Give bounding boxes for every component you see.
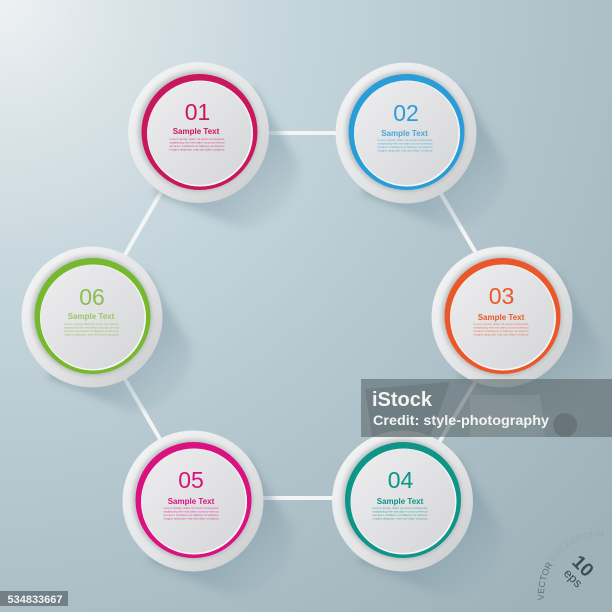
body text 05: sadipscing elitr sed diam nonumy eirmod	[164, 510, 219, 514]
number 06: 06	[79, 284, 105, 310]
body text 02: magna aliquyam erat sed diam voluptua	[378, 148, 433, 152]
body text 04: tempor invidunt ut labore et dolore	[372, 513, 428, 517]
body text 02: Lorem ipsum dolor sit amet consetetur	[378, 138, 432, 142]
hexagon connector lines	[122, 133, 480, 498]
circle 05	[122, 430, 264, 572]
body text 04: Lorem ipsum dolor sit amet consetetur	[372, 506, 428, 510]
long shadows	[47, 88, 602, 596]
body text 04: magna aliquyam erat sed diam voluptua	[372, 516, 428, 520]
body text 05	[164, 506, 219, 520]
body text 02: sadipscing elitr sed diam nonumy eirmod	[378, 142, 433, 146]
number 05: 05	[178, 467, 204, 493]
label 02: Sample Text	[381, 129, 428, 138]
body text 01: Lorem ipsum dolor sit amet consetetur	[170, 137, 224, 141]
body text 04: sadipscing elitr sed diam nonumy eirmod	[372, 510, 428, 514]
body text 06: sadipscing elitr sed diam nonumy eirmod	[64, 326, 119, 330]
label 03: Sample Text	[478, 313, 525, 322]
body text 05: Lorem ipsum dolor sit amet consetetur	[164, 506, 218, 510]
badge version: 10	[567, 552, 597, 581]
circle 06	[22, 246, 162, 388]
body text 05: magna aliquyam erat sed diam voluptua	[164, 516, 219, 520]
body text 03: sadipscing elitr sed diam nonumy eirmod	[474, 326, 529, 330]
body text 04	[372, 506, 428, 520]
label 01: Sample Text	[173, 127, 220, 136]
number 02: 02	[393, 100, 419, 126]
body text 06: Lorem ipsum dolor sit amet consetetur	[64, 322, 119, 326]
body text 01: tempor invidunt ut labore et dolore	[170, 144, 225, 148]
watermark banner	[361, 379, 612, 437]
body text 02: tempor invidunt ut labore et dolore	[378, 145, 433, 149]
number 04: 04	[388, 467, 413, 493]
number 03: 03	[489, 283, 514, 309]
body text 01: magna aliquyam erat sed diam voluptua	[170, 148, 225, 152]
body text 05: tempor invidunt ut labore et dolore	[164, 513, 219, 517]
body text 03: Lorem ipsum dolor sit amet consetetur	[474, 322, 528, 326]
body text 03	[474, 322, 529, 336]
watermark brand: iStock	[372, 389, 433, 411]
circle 02	[336, 62, 476, 204]
body text 02	[378, 138, 433, 152]
body text 03: magna aliquyam erat sed diam voluptua	[474, 332, 529, 336]
body text 06: tempor invidunt ut labore et dolore	[64, 329, 119, 333]
image id tag	[0, 591, 68, 606]
watermark credit: Credit: style-photography	[373, 412, 549, 428]
body text 01: sadipscing elitr sed diam nonumy eirmod	[170, 140, 225, 144]
label 05: Sample Text	[168, 497, 215, 506]
label 06: Sample Text	[68, 312, 115, 321]
body text 01	[170, 137, 225, 152]
badge curved caption: VECTOR BACKGROUND	[538, 530, 603, 600]
circle 03	[432, 246, 572, 388]
number 01: 01	[185, 99, 210, 125]
circle 04	[332, 430, 473, 572]
circle 01	[128, 62, 269, 203]
badge format: eps	[561, 566, 585, 590]
body text 03: tempor invidunt ut labore et dolore	[474, 329, 529, 333]
body text 06	[64, 322, 119, 336]
image id tag: 534833667	[7, 594, 63, 606]
body text 06: magna aliquyam erat sed diam voluptua	[64, 332, 119, 336]
label 04: Sample Text	[377, 497, 424, 506]
